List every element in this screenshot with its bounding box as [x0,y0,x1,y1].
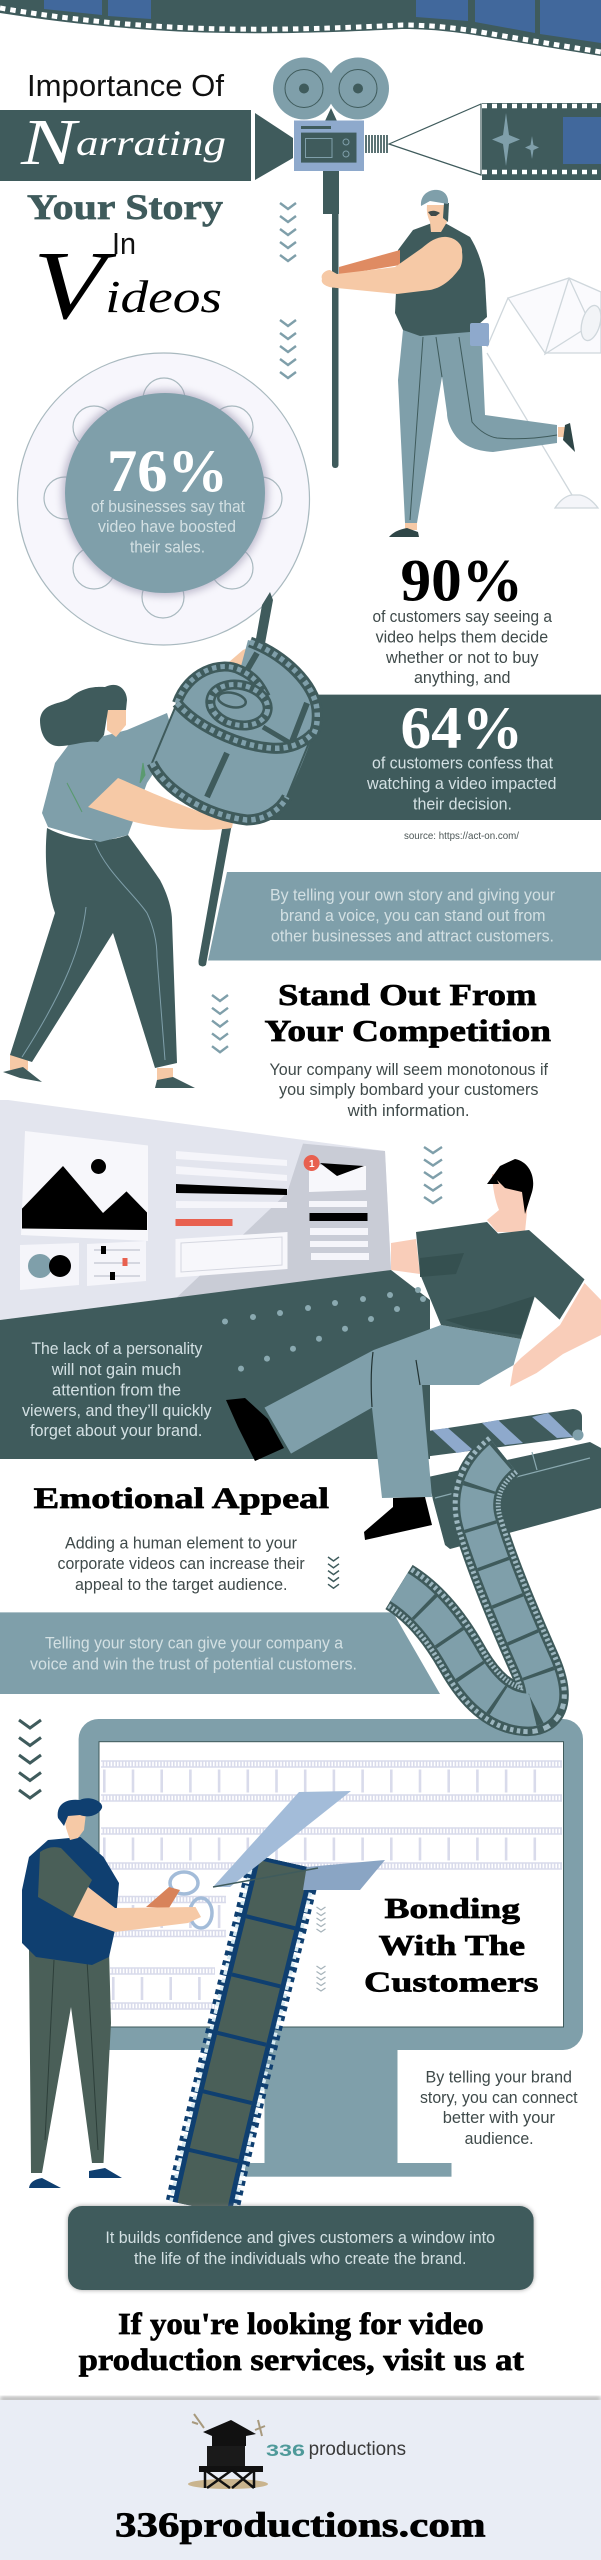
heading: call to action: If you're looking for video [118,2306,484,2341]
title banner: Narrating: N [20,106,81,179]
icon: chevrons down [280,203,296,261]
text: monotonous [270,1060,548,1120]
text: connect better [420,2068,578,2148]
panel: personality band: viewers, and they’ll quickly [22,1401,212,1420]
stat: 90 percent: video helps them decide [376,628,548,646]
stat: 90 percent: whether or not to buy [385,648,539,667]
heading: call to action: production services, visit us at [79,2342,525,2377]
panel: personality band [0,1270,430,1459]
illustration: web page panel: 1 [309,1159,315,1170]
heading: Emotional Appeal: Emotional Appeal [34,1482,329,1515]
stat: 90 percent: of customers say seeing a [372,607,552,626]
illustration: monitor [79,1719,583,2177]
icon: chevrons down [212,995,228,1052]
panel: 76 percent film reel: 76% [107,438,228,504]
title banner: Narrating: arrating [76,123,226,163]
panel: 64 percent band [258,695,601,820]
panel: 76 percent film reel: video have boosted [98,517,236,536]
stat: 90 percent [372,548,552,687]
panel: 76 percent film reel [18,353,310,645]
panel: footer [0,2397,601,2560]
icon: chevrons down [316,1966,326,1991]
website URL: 336productions.com [115,2506,486,2545]
title banner: Narrating [0,106,293,181]
panel: confidence callout [68,2206,534,2290]
heading: Bonding With The Customers: With The [379,1930,525,1962]
logo: 336 productions [188,2414,406,2489]
heading: call to action [79,2306,525,2377]
icon: chevrons down [316,1907,326,1932]
film strip banner top [0,0,601,56]
logo: 336 productions: productions [309,2439,406,2460]
icon: chevrons down [280,320,296,378]
panel: 64 percent band: watching a video impacted [366,774,556,793]
illustration: clapperboard [422,1409,601,1549]
heading: Bonding With The Customers: Customers [364,1967,538,1999]
source note: source: https://act-on.com/ [404,830,519,842]
text: connect better: By telling your brand [426,2068,572,2087]
stat: 90 percent: 90% [400,548,523,614]
film strip right of camera [482,103,601,180]
panel: brand voice band: brand a voice, you can stand out from [280,906,546,925]
logo: 336 productions: 336 [266,2441,305,2460]
heading: Bonding With The Customers [364,1893,538,1999]
icon: chevrons down [328,1557,339,1588]
heading: Stand Out From Your Competition: Stand Out From [278,977,537,1012]
illustration: scissors [170,1791,385,1928]
panel: personality band: forget about your brand. [30,1421,202,1440]
illustration: man with scissors [22,1798,201,2188]
panel: 64 percent band: of customers confess that [372,754,553,772]
illustration: web page panel [0,1100,391,1320]
panel: confidence callout: the life of the individuals who create the brand. [134,2249,466,2268]
panel: personality band: attention from the [52,1380,181,1399]
panel: trust band [0,1612,440,1694]
illustration: film ribbon [399,1455,543,1710]
illustration: softbox light [487,278,601,508]
illustration: cameraman [322,190,575,537]
text: monotonous: you simply bombard your customers [279,1080,538,1099]
title: Importance Of: Importance Of [27,68,224,103]
panel: brand voice band: other businesses and attract customers. [271,927,554,946]
icon: film camera [273,58,481,468]
panel: personality band: will not gain much [51,1360,181,1379]
text: connect better: audience. [465,2129,534,2148]
panel: brand voice band: By telling your own story and giving your [270,886,555,905]
panel: trust band: Telling your story can give your company a [45,1634,344,1653]
heading: Bonding With The Customers: Bonding [384,1893,521,1925]
text: monotonous: with information. [347,1101,470,1120]
title: Videos: V [33,232,117,340]
text: human element [58,1534,305,1594]
text: connect better: better with your [443,2108,555,2127]
panel: confidence callout: It builds confidence and gives customers a window into [105,2228,495,2247]
illustration: film strip being cut [202,1862,285,2208]
heading: Stand Out From Your Competition [264,977,551,1048]
panel: 76 percent film reel: of businesses say that [91,497,245,516]
title: Your Story: Your Story [27,187,223,227]
text: human element: appeal to the target audience. [75,1575,288,1594]
illustration: seated man with laptop panel [226,1159,601,1540]
illustration: woman with film roll [3,592,317,1088]
panel: brand voice band [208,872,601,960]
heading: Stand Out From Your Competition: Your Competition [264,1013,551,1048]
panel: 76 percent film reel: their sales. [130,538,205,556]
panel: 64 percent band: their decision. [413,794,512,814]
text: human element: Adding a human element to your [65,1534,297,1552]
icon: chevrons down [19,1720,41,1798]
panel: personality band: The lack of a personality [31,1339,203,1358]
panel: 64 percent band: 64% [400,695,523,761]
title: Videos: ideos [105,271,222,322]
stat: 90 percent: anything, and [414,668,510,687]
text: connect better: story, you can connect [420,2088,578,2107]
text: human element: corporate videos can increase their [58,1554,305,1573]
panel: trust band: voice and win the trust of potential customers. [30,1654,357,1673]
title: In: In [112,226,136,261]
text: monotonous: Your company will seem monotonous if [270,1060,548,1079]
icon: chevrons down [424,1147,442,1203]
